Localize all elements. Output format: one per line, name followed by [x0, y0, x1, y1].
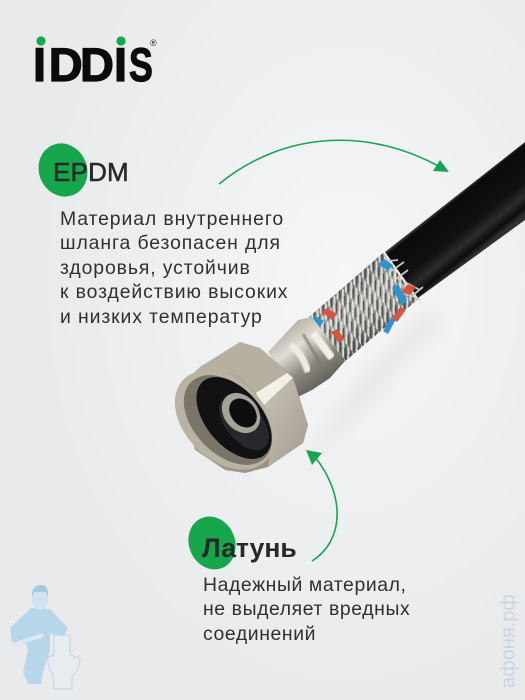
text: EPDM description: Материал внутреннего [60, 208, 284, 230]
product photo: hose with fitting [155, 142, 525, 489]
text: EPDM description: и низких температур [60, 306, 263, 328]
heading: EPDM: EPDM [53, 157, 129, 187]
black rubber hose [385, 142, 525, 298]
logo [33, 36, 157, 84]
green blob: Latun [181, 509, 243, 577]
watermark text: афоня.рф [498, 594, 520, 688]
logo wordmark [33, 38, 153, 91]
text: Latun description: не выделяет вредных [203, 598, 410, 620]
arrow: brass to nut [306, 450, 337, 561]
heading: Latun: Латунь [202, 533, 297, 563]
text: Latun description: Надежный материал, [203, 574, 407, 596]
text: EPDM description: здоровья, устойчив [60, 257, 251, 279]
watermark icon: plumber with toilet [10, 585, 80, 689]
registered mark: ® [150, 38, 157, 48]
arrow: EPDM to hose [219, 140, 449, 184]
text: Latun description [203, 574, 410, 645]
text: EPDM description: к воздействию высоких [60, 281, 288, 303]
text: EPDM description [60, 208, 288, 328]
hex nut [155, 342, 308, 489]
logo dots [36, 36, 126, 46]
text: Latun description: соединений [203, 623, 316, 645]
brass collar [268, 317, 345, 397]
metal braid [308, 253, 423, 363]
text: EPDM description: шланга безопасен для [60, 232, 281, 254]
green blob: EPDM [31, 136, 95, 204]
